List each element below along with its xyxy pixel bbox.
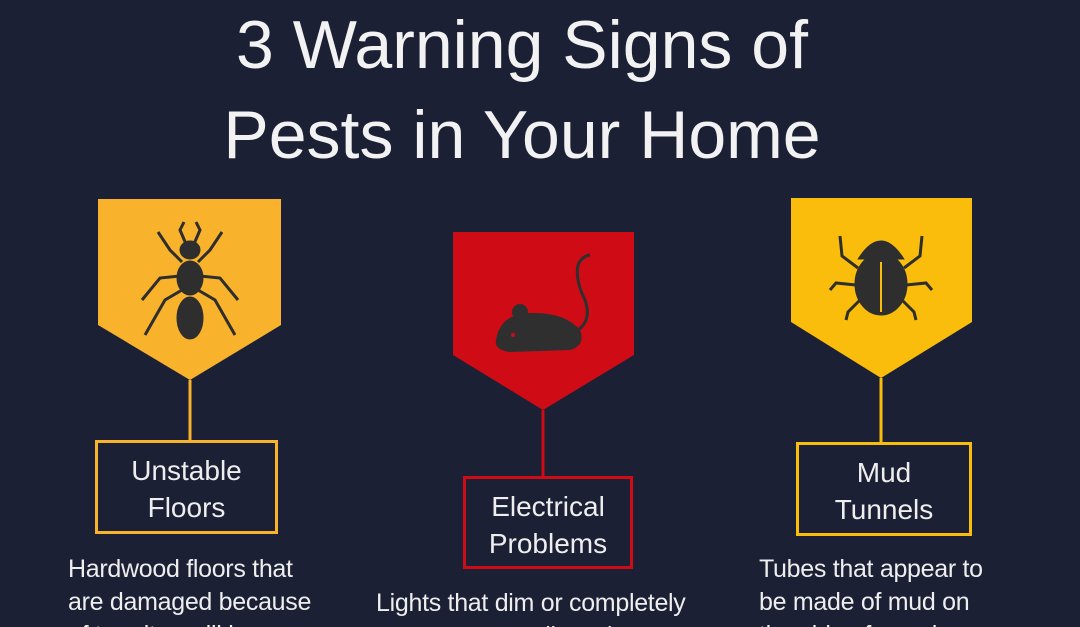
text: floors description — [68, 555, 311, 627]
label: Electrical Problems: Problems — [489, 528, 607, 559]
icon: ant — [142, 222, 238, 338]
text: floors description: are damaged because — [68, 588, 311, 616]
icon: mouse — [496, 255, 590, 352]
panel: ant badge — [98, 199, 281, 440]
label: Unstable Floors: Floors — [148, 492, 225, 523]
text: electrical description: Lights that dim or completely — [376, 589, 686, 617]
text: tunnels description: Tubes that appear to — [759, 555, 983, 583]
label: Mud Tunnels: Tunnels — [835, 494, 933, 525]
label: Mud Tunnels — [796, 442, 972, 536]
label: Unstable Floors: Unstable — [131, 455, 242, 486]
icon: beetle — [830, 236, 932, 320]
label: Electrical Problems — [463, 476, 633, 569]
text: tunnels description — [759, 555, 993, 627]
title — [223, 7, 821, 173]
label: Electrical Problems: Electrical — [491, 491, 605, 522]
panel: beetle badge — [791, 198, 972, 442]
text: tunnels description: be made of mud on — [759, 588, 969, 616]
label: Unstable Floors — [95, 440, 278, 534]
title: Pests in Your Home — [223, 97, 821, 173]
title: 3 Warning Signs of — [236, 7, 808, 83]
text: floors description: Hardwood floors that — [68, 555, 293, 583]
panel: mouse badge — [453, 232, 634, 476]
label: Mud Tunnels: Mud — [857, 457, 911, 488]
